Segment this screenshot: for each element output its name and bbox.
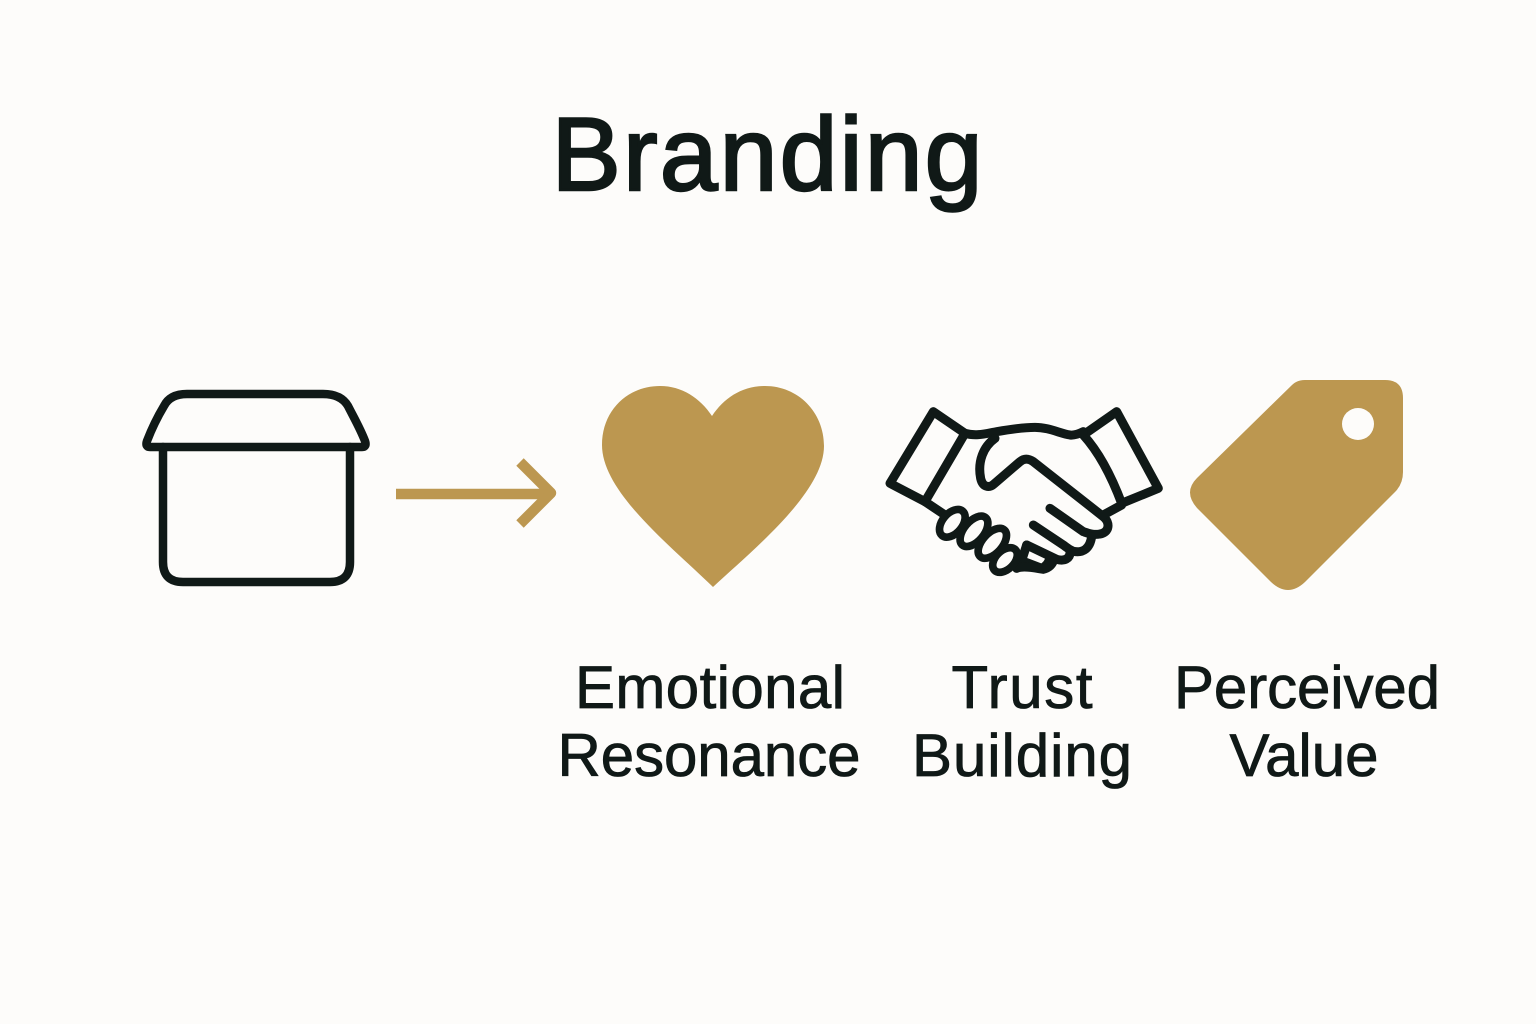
label: perceived value: Value: [1230, 722, 1378, 789]
arrow: [396, 462, 551, 524]
label: trust building: Trust: [952, 654, 1093, 721]
label: trust building: [912, 654, 1132, 789]
title: Branding: [552, 97, 982, 213]
label: perceived value: [1174, 654, 1440, 789]
icon: handshake: [890, 412, 1158, 577]
label: perceived value: Perceived: [1174, 654, 1440, 721]
icon: heart: [602, 386, 824, 587]
label: emotional resonance: [558, 654, 860, 789]
label: emotional resonance: Resonance: [558, 722, 860, 789]
icon: price tag: [1190, 380, 1403, 590]
label: trust building: Building: [912, 722, 1132, 789]
icon: box: [146, 394, 366, 582]
label: emotional resonance: Emotional: [575, 654, 845, 721]
